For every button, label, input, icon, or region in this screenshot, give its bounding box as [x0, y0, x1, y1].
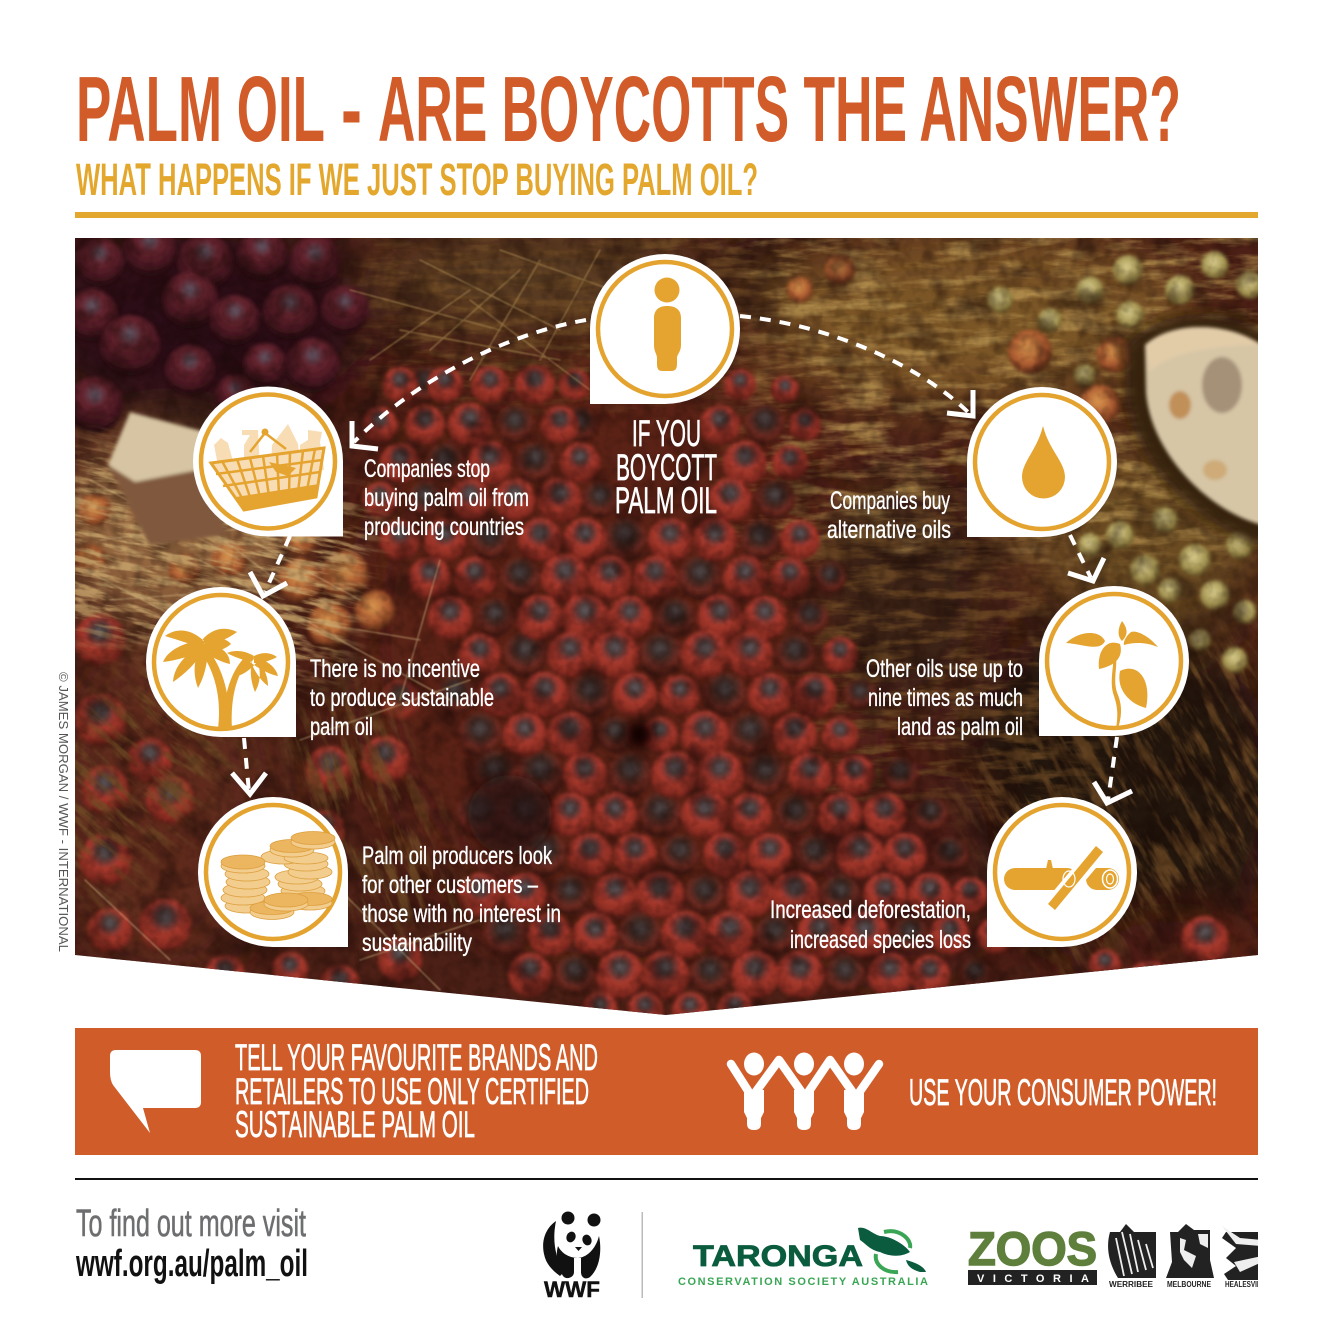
photo: dark shadows — [468, 721, 656, 855]
logo divider — [642, 1212, 643, 1298]
arrow: other oils to deforestation — [1094, 737, 1132, 803]
icon: oil drop — [1022, 426, 1065, 498]
text: other customers: Palm oil producers look — [362, 842, 552, 870]
arrow: boycott to companies stop — [352, 320, 586, 449]
text: deforestation: increased species loss — [790, 926, 971, 954]
footer rule — [75, 1178, 1258, 1180]
panel: call to action banner — [75, 1028, 1258, 1155]
text: no incentive: palm oil — [310, 713, 373, 741]
logo: Taronga — [678, 1228, 928, 1288]
photo: tan strands — [75, 427, 466, 948]
text: alternative oils: Companies buy — [830, 487, 950, 515]
heading: if you boycott palm oil: IF YOU — [632, 413, 701, 454]
text: no incentive — [310, 655, 494, 741]
icon: gorilla: MELBOURNE — [1167, 1280, 1212, 1289]
text: tell your favourite brands: TELL YOUR FAVOURITE BRANDS AND — [235, 1037, 598, 1078]
photo: fibre lines — [85, 250, 640, 990]
photo: mottled light and shadow — [75, 238, 1258, 1018]
heading: if you boycott palm oil — [615, 413, 717, 521]
text: companies stop: Companies stop — [364, 455, 490, 483]
logo: Zoos Victoria: VICTORIA — [977, 1273, 1089, 1285]
text: other customers: for other customers – — [362, 871, 538, 899]
icon: seedling — [1066, 621, 1158, 729]
header rule — [75, 212, 1258, 218]
text: no incentive: There is no incentive — [310, 655, 480, 683]
text: deforestation — [770, 896, 971, 954]
logo: Taronga: TARONGA — [693, 1240, 863, 1273]
heading: if you boycott palm oil: PALM OIL — [615, 480, 717, 521]
logo: WWF panda — [543, 1212, 600, 1302]
arrow: companies buy to other oils — [1068, 535, 1104, 581]
text: alternative oils: alternative oils — [827, 516, 951, 544]
text: other customers: those with no interest in — [362, 900, 561, 928]
pin: other customers — [198, 797, 348, 947]
pin: deforestation — [987, 797, 1137, 947]
title: PALM OIL — [76, 57, 325, 161]
icon: zebra — [1108, 1224, 1156, 1289]
pin: if you boycott — [590, 254, 740, 404]
icon: coin stacks — [221, 832, 335, 920]
icon: zebra: WERRIBEE — [1109, 1280, 1154, 1289]
icon: logs — [1004, 846, 1119, 910]
footer: find out more: wwf.org.au/palm_oil — [75, 1243, 308, 1285]
pin: nine times as much land — [1039, 586, 1189, 736]
text: tell your favourite brands: RETAILERS TO USE ONLY CERTIFIED — [235, 1071, 589, 1112]
text: other customers: sustainability — [362, 929, 472, 957]
pin: alternative oils — [967, 387, 1117, 537]
text: alternative oils — [827, 487, 951, 544]
title: - — [341, 57, 362, 161]
heading: if you boycott palm oil: BOYCOTT — [616, 447, 717, 488]
icon: palm trees — [163, 629, 278, 729]
text: deforestation: Increased deforestation, — [770, 896, 971, 924]
text: nine times as much land: Other oils use up to — [866, 655, 1023, 683]
text: tell your favourite brands: SUSTAINABLE PALM OIL — [235, 1104, 475, 1145]
arrow: if you boycott to companies buy — [740, 316, 973, 416]
logo: Zoos Victoria: ZOOS — [968, 1222, 1097, 1275]
text: other customers — [362, 842, 561, 957]
pin: companies stop buying — [193, 386, 343, 536]
logo: Zoos Victoria — [968, 1222, 1270, 1289]
subtitle: WHAT HAPPENS IF WE JUST STOP BUYING PALM OIL? — [76, 154, 758, 205]
photo: palm fruit clusters — [66, 224, 1264, 1028]
text: companies stop: producing countries — [364, 513, 524, 541]
text: nine times as much land: land as palm oil — [897, 713, 1023, 741]
title — [76, 57, 1181, 161]
text: nine times as much land — [866, 655, 1023, 741]
panel: palm fruit photograph — [0, 200, 1333, 1028]
icon: platypus: HEALESVILLE — [1225, 1280, 1270, 1289]
photo: grain — [75, 238, 1258, 1018]
text: tell your favourite brands — [235, 1037, 598, 1145]
text: companies stop: buying palm oil from — [364, 484, 529, 512]
footer: find out more: To find out more visit — [76, 1203, 306, 1245]
photo credit: © JAMES MORGAN / WWF - INTERNATIONAL — [56, 672, 71, 952]
icon: gorilla — [1166, 1224, 1214, 1289]
arrow: palm oil producers from no incentive — [232, 738, 266, 794]
footer: find out more — [75, 1203, 308, 1285]
icon: three people — [731, 1052, 879, 1130]
pin: no incentive — [146, 587, 296, 737]
icon: shopping basket — [211, 424, 324, 510]
text: companies stop — [364, 455, 529, 541]
text: nine times as much land: nine times as much — [868, 684, 1023, 712]
icon: platypus — [1222, 1226, 1258, 1287]
arrow: companies stop to no incentive — [250, 536, 290, 596]
icon: speech bubble — [110, 1050, 201, 1133]
text: no incentive: to produce sustainable — [310, 684, 494, 712]
photo: right stump — [1125, 314, 1270, 550]
logo: Taronga: CONSERVATION SOCIETY AUSTRALIA — [678, 1276, 928, 1288]
photo: fibrous textures — [356, 238, 1258, 975]
photo: left stump — [108, 412, 228, 545]
icon: person — [654, 278, 681, 371]
logo: WWF panda: WWF — [544, 1277, 600, 1302]
